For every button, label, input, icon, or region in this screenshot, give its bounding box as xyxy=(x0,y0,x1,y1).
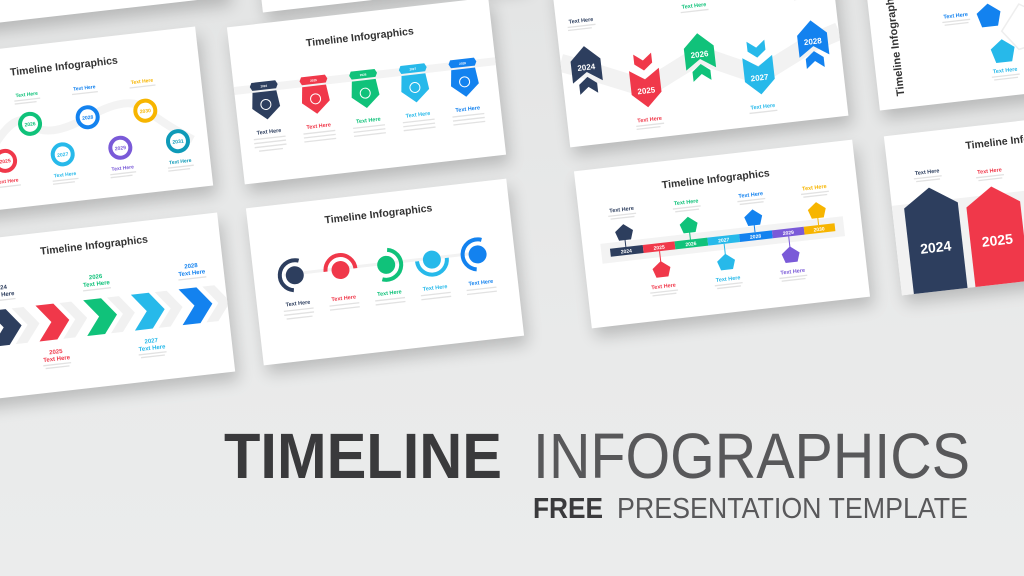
slide: circle timeline: 2031 xyxy=(172,139,184,146)
slide: top-left partial xyxy=(0,0,228,26)
slide: zigzag arrows: 2025 xyxy=(637,85,656,96)
slide: chevron arrows: 2028 xyxy=(184,263,199,271)
slide: badge timeline: 2024 xyxy=(260,84,268,88)
slide: bar timeline: Text Here xyxy=(609,206,634,215)
slide: zigzag arrows: Text Here xyxy=(750,103,776,112)
slide: circle timeline: 2026 xyxy=(24,121,36,128)
slide: circle timeline: 2029 xyxy=(115,145,127,152)
slide: arc circles: Text Here xyxy=(331,294,356,303)
slide: big arrow columns: 2025 xyxy=(981,230,1014,250)
slide: badge timeline: Text Here xyxy=(455,105,480,114)
slide: big arrow columns: Text Here xyxy=(915,168,940,177)
slide: big arrow columns: Text Here xyxy=(977,167,1002,176)
slide: circle timeline: Text Here xyxy=(111,164,134,173)
slide: zigzag arrows: 2024 xyxy=(577,62,596,73)
subheading: FREE PRESENTATION TEMPLATE: PRESENTATION TEMPLATE xyxy=(617,493,968,525)
slide: vertical title pentagons xyxy=(862,0,1024,110)
slide: badge timeline: Text Here xyxy=(405,111,431,120)
slide: circle timeline: 2028 xyxy=(82,115,94,122)
slide: circle timeline: Text Here xyxy=(73,84,96,93)
slide: zigzag arrows: 2026 xyxy=(690,49,709,60)
slide: zigzag arrows: Text Here xyxy=(681,2,707,11)
heading: TIMELINE INFOGRAPHICS xyxy=(224,420,970,492)
slide: arc circles: Timeline Infographics xyxy=(324,202,433,226)
slide: top-middle partial xyxy=(245,0,526,12)
slide: chevron arrows: 2026 xyxy=(89,274,103,281)
slide: bar timeline: 2024 xyxy=(621,248,632,256)
heading: TIMELINE INFOGRAPHICS: INFOGRAPHICS xyxy=(533,420,970,492)
slide: bar timeline: Text Here xyxy=(716,275,741,284)
slide: badge timeline: 2025 xyxy=(310,78,317,83)
slide: circle timeline: Timeline Infographics xyxy=(9,55,119,79)
slide: circle timeline: Text Here xyxy=(54,171,77,179)
slide: zigzag arrows xyxy=(552,0,848,147)
slide: arc circles: Text Here xyxy=(423,284,448,293)
slide: circle timeline xyxy=(0,27,213,215)
slide: chevron arrows: Timeline Infographics xyxy=(40,234,149,258)
slide: bar timeline: 2026 xyxy=(685,241,697,248)
slide: bar timeline: Text Here xyxy=(651,283,676,291)
slide: chevron arrows: Text Here xyxy=(43,355,71,364)
slide: bar timeline: 2029 xyxy=(783,230,794,237)
heading: TIMELINE INFOGRAPHICS: TIMELINE xyxy=(224,420,502,492)
slide: zigzag arrows: Text Here xyxy=(637,116,662,125)
slide: zigzag arrows: 2027 xyxy=(750,72,770,83)
slide: bar timeline: Text Here xyxy=(802,184,827,193)
slide: chevron arrows: 2027 xyxy=(144,338,159,346)
slide: badge timeline: 2026 xyxy=(360,72,367,77)
slide: vertical title pentagons: Text Here xyxy=(943,12,968,21)
slide: bar timeline: 2027 xyxy=(718,237,730,244)
slide: arc circles: Text Here xyxy=(285,300,311,308)
slide: badge timeline: Text Here xyxy=(356,117,381,125)
slide: bar timeline: 2025 xyxy=(653,245,665,252)
slide: arc circles xyxy=(246,179,524,365)
slide: zigzag arrows: 2028 xyxy=(803,36,823,47)
slide: big arrow columns xyxy=(884,105,1024,295)
slide: bar timeline: Text Here xyxy=(674,198,699,207)
slide: chevron arrows: Text Here xyxy=(178,269,206,278)
slide: zigzag arrows: Text Here xyxy=(568,17,594,26)
subheading: FREE PRESENTATION TEMPLATE: FREE xyxy=(533,493,603,525)
slide: bar timeline: 2028 xyxy=(750,234,762,241)
slide: chevron arrows xyxy=(0,213,235,401)
slide: bar timeline: Timeline Infographics xyxy=(661,167,770,191)
slide: bar timeline: Text Here xyxy=(738,191,763,200)
slide: big arrow columns: 2024 xyxy=(919,237,952,257)
slide: arc circles: Text Here xyxy=(377,289,402,298)
slide: chevron arrows: Text Here xyxy=(83,280,111,289)
slide: bar timeline xyxy=(574,140,870,328)
main title xyxy=(224,420,970,525)
slide: chevron arrows: 2025 xyxy=(49,349,64,356)
slide: bar timeline: Text Here xyxy=(780,268,805,277)
slide: chevron arrows: Text Here xyxy=(138,344,166,353)
slide: badge timeline: Timeline Infographics xyxy=(305,25,415,49)
slide: arc circles: Text Here xyxy=(468,279,493,288)
slide: circle timeline: Text Here xyxy=(169,158,192,166)
slide: badge timeline: 2028 xyxy=(459,61,466,66)
slide: circle timeline: Text Here xyxy=(131,78,154,86)
slide: badge timeline xyxy=(227,0,506,184)
slide: badge timeline: Text Here xyxy=(306,122,331,131)
slide: badge timeline: Text Here xyxy=(256,128,282,137)
slide: badge timeline: 2027 xyxy=(409,67,417,71)
slide: circle timeline: 2030 xyxy=(140,108,151,115)
slide: vertical title pentagons: Text Here xyxy=(993,67,1018,75)
slide: bar timeline: 2030 xyxy=(813,226,825,234)
slide: circle timeline: Text Here xyxy=(15,91,38,99)
slide: circle timeline: 2027 xyxy=(57,152,69,159)
